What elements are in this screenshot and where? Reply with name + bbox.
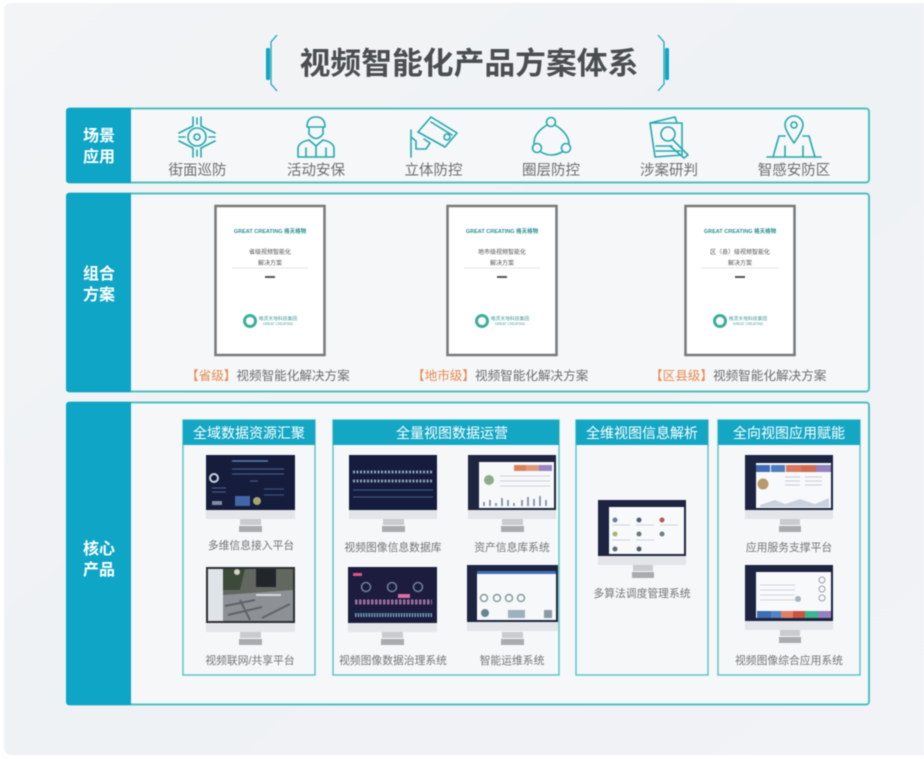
column heading [333,420,559,445]
column heading: 全域数据资源汇聚 [193,425,305,441]
document: district [686,206,794,355]
document: district: GREAT CREATING 格天格物 [704,227,777,235]
document: province [216,206,324,355]
document: district: 格灵天地科技集团 [729,315,767,322]
column heading [183,420,315,445]
column heading: 全量视图数据运营 [396,425,508,441]
label: 智能运维系统 [480,653,545,667]
document: district: GREAT CREATING [733,322,764,326]
column heading [718,420,860,445]
scenario: 3D surveillance [404,117,462,179]
core products side label: 核心 [83,539,115,558]
column: application empowerment [718,420,860,675]
document: city [448,206,556,355]
document: province: 省级视频智能化 [249,248,291,256]
monitor: video network sharing platform [206,567,295,645]
label: 视频图像信息数据库 [344,540,442,554]
monitor: multi-algorithm scheduling [598,500,686,578]
icon: crossroads [179,117,215,157]
column: data operations [333,420,559,675]
panel: core products [66,402,869,705]
monitor: asset database system [468,455,556,532]
document: district: 解决方案 [728,259,752,267]
icon: map pin [767,116,821,157]
icon: three-node ring [532,118,570,155]
caption: province: 【省级】视频智能化解决方案 [186,368,350,383]
document: city: GREAT CREATING 格天格物 [466,227,539,235]
core products side label: 产品 [83,561,115,579]
solutions side label: 组合 [83,264,115,283]
title left bracket [266,35,277,91]
title text: 视频智能化产品方案体系 [300,46,638,81]
label: 应用服务支撑平台 [746,540,832,554]
document: province: GREAT CREATING 格天格物 [234,227,307,235]
document: city: 地市级视频智能化 [478,248,526,256]
title [266,35,669,91]
monitor: video image database [349,455,437,532]
monitor: integrated application system [745,565,833,643]
label: 资产信息库系统 [474,540,550,554]
scenario side label: 场景 [83,127,115,145]
scenario: 3D surveillance: 立体防控 [404,162,462,179]
document: city: 解决方案 [490,259,514,267]
scenario: smart safe zone [758,116,830,179]
scenario: layered control [522,118,580,179]
column heading: 全向视图应用赋能 [733,425,845,441]
scenario: event security: 活动安保 [287,162,345,179]
icon: security guard [298,117,334,157]
core products side label [66,402,131,705]
scenario: case analysis [640,117,698,179]
scenario: smart safe zone: 智感安防区 [758,162,830,179]
scenario: case analysis: 涉案研判 [640,161,698,179]
monitor: application service platform [745,455,833,532]
panel: scenario applications [66,108,869,183]
label: 视频图像数据治理系统 [339,653,447,667]
caption: district: 【区县级】视频智能化解决方案 [650,368,827,383]
scenario side label [66,108,131,183]
document: city: 格灵天地科技集团 [491,315,529,322]
scenario: street patrol [168,117,226,179]
column heading [576,420,708,445]
scenario side label: 应用 [83,147,115,166]
panel: combined solutions [66,193,869,392]
label: 多算法调度管理系统 [593,586,691,600]
scenario: event security [287,117,345,179]
column heading: 全维视图信息解析 [586,425,698,441]
document: city: GREAT CREATING [495,322,526,326]
document: province: 格灵天地科技集团 [259,315,297,322]
monitor: smart operations system [467,565,558,645]
solutions side label [66,193,131,392]
label: 视频联网/共享平台 [205,653,295,667]
title right bracket [658,35,669,91]
caption: city: 【地市级】视频智能化解决方案 [412,368,589,383]
icon: surveillance camera [411,117,457,157]
scenario: street patrol: 街面巡防 [168,162,226,179]
scenario: layered control: 圈层防控 [522,162,580,179]
document: province: 解决方案 [258,259,282,267]
column: data aggregation [183,420,315,675]
monitor: multi-dimensional access platform [206,455,295,532]
column: information parsing [576,420,708,675]
icon: dossier and magnifier [650,117,688,158]
monitor: data governance system [348,567,437,645]
solutions side label: 方案 [83,285,115,304]
label: 多维信息接入平台 [208,538,294,552]
label: 视频图像综合应用系统 [735,653,843,667]
document: province: GREAT CREATING [263,322,294,326]
document: district: 区（县）级视频智能化 [710,248,770,256]
